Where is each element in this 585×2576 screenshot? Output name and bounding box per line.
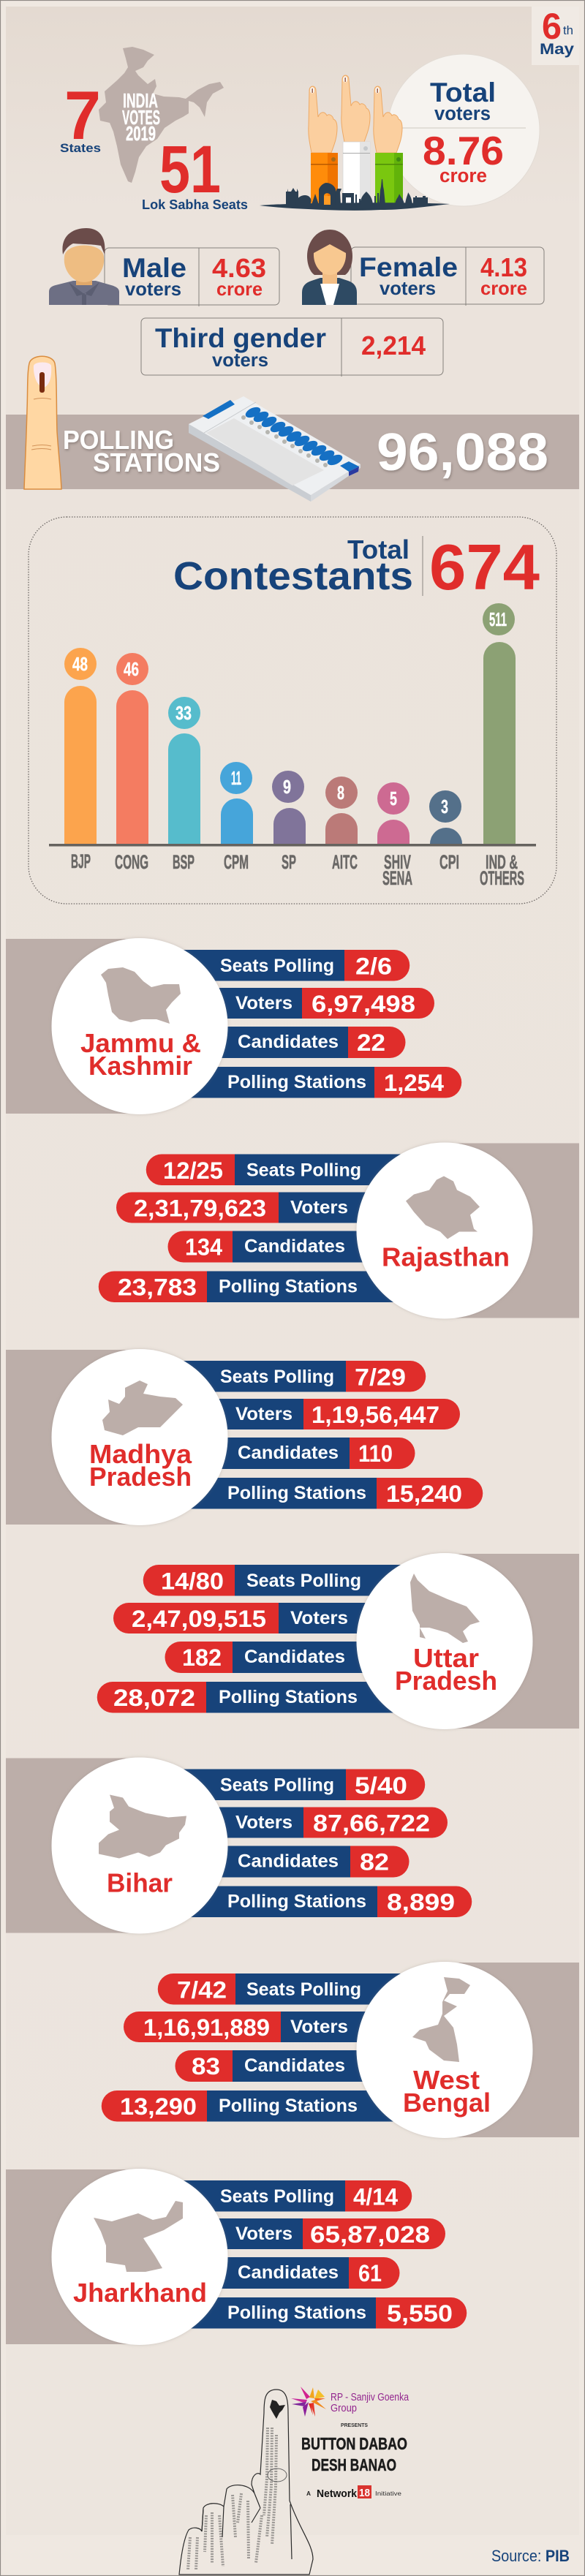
row: polling stations bbox=[97, 1682, 437, 1712]
total voters circle: crore bbox=[439, 165, 487, 186]
panel: third gender voters: 2,214 bbox=[361, 331, 426, 360]
row: polling stations: Polling Stations bbox=[219, 2096, 358, 2116]
bar: SP 9: SP bbox=[282, 851, 296, 873]
row: seats polling: Seats Polling bbox=[220, 956, 334, 976]
state name: Bihar bbox=[107, 1867, 173, 1898]
logo: A Network18 Initiative: Network bbox=[317, 2488, 358, 2500]
row: voters bbox=[146, 988, 434, 1019]
row: voters: Voters bbox=[290, 2017, 348, 2037]
row: candidates: 110 bbox=[358, 1440, 393, 1467]
date badge bbox=[532, 6, 579, 65]
bar: AITC 8: AITC bbox=[332, 851, 358, 873]
row: polling stations: 23,783 bbox=[118, 1274, 197, 1300]
bar: BJP 48: 48 bbox=[72, 653, 88, 675]
tagline: Button Dabao Desh Banao: DESH BANAO bbox=[312, 2455, 396, 2474]
stat: 7 states: States bbox=[60, 141, 101, 155]
icon: inked finger bbox=[24, 356, 61, 489]
icon: Delhi skyline bbox=[260, 179, 450, 211]
bar: CPI 3 bbox=[429, 790, 462, 873]
heading: total contestants: Total bbox=[347, 535, 410, 564]
panel: female voters bbox=[302, 230, 544, 306]
row: seats polling: Seats Polling bbox=[246, 1979, 361, 2000]
panel: third gender voters: Third gender bbox=[155, 323, 326, 353]
date badge: th bbox=[563, 23, 573, 37]
India map with title: INDIA bbox=[123, 89, 158, 112]
row: voters bbox=[146, 1808, 448, 1838]
row: voters bbox=[113, 1603, 439, 1633]
row: candidates: Candidates bbox=[238, 1032, 339, 1052]
row: polling stations: Polling Stations bbox=[227, 1483, 366, 1503]
icon: woman bbox=[302, 230, 357, 305]
row: voters: Voters bbox=[235, 993, 292, 1013]
panel: Jammu & Kashmir bbox=[6, 938, 461, 1114]
panel: Rajasthan bbox=[99, 1142, 579, 1319]
bar: Independents and others 511: IND & bbox=[486, 851, 518, 873]
row: seats polling bbox=[146, 1154, 439, 1185]
row: voters: 1,16,91,889 bbox=[143, 2014, 270, 2041]
map: West Bengal bbox=[412, 1977, 470, 2062]
row: seats polling: Seats Polling bbox=[246, 1160, 361, 1180]
box bbox=[105, 248, 279, 305]
logo: A Network18 Initiative bbox=[306, 2485, 401, 2500]
bar: SP 9: 9 bbox=[283, 776, 291, 798]
row: candidates: 22 bbox=[357, 1030, 385, 1056]
row: candidates bbox=[168, 1231, 437, 1262]
heading: total contestants: 674 bbox=[429, 531, 540, 603]
panel: Bihar bbox=[6, 1758, 472, 1933]
bar: AITC 8 bbox=[325, 777, 358, 873]
state name: Rajasthan bbox=[382, 1242, 510, 1272]
text: presents: PRESENTS bbox=[341, 2422, 368, 2428]
bar: CPI 3: CPI bbox=[439, 851, 459, 873]
row: candidates bbox=[146, 1846, 410, 1878]
panel: male voters: voters bbox=[125, 278, 181, 300]
state name bbox=[80, 1028, 201, 1081]
total voters circle: Total bbox=[430, 78, 496, 107]
row: seats polling bbox=[146, 2180, 412, 2211]
row: voters: Voters bbox=[235, 2224, 292, 2244]
icon: voting machine bbox=[189, 396, 361, 502]
panel: male voters: crore bbox=[216, 278, 263, 300]
bar: Shiv Sena 5: SHIV bbox=[384, 851, 411, 873]
state name bbox=[403, 2065, 491, 2118]
row: seats polling bbox=[146, 1769, 425, 1800]
state name: Kashmir bbox=[88, 1051, 192, 1081]
row: seats polling: Seats Polling bbox=[220, 2186, 334, 2207]
stat: 51 Lok Sabha seats bbox=[142, 132, 248, 212]
row: seats polling: 2/6 bbox=[355, 953, 392, 980]
row: candidates: 134 bbox=[185, 1234, 222, 1261]
row: candidates: Candidates bbox=[244, 2055, 345, 2076]
row: polling stations bbox=[99, 1271, 437, 1302]
map: Rajasthan bbox=[406, 1176, 480, 1239]
row: voters bbox=[116, 1192, 439, 1223]
state name: West bbox=[413, 2065, 480, 2095]
row: polling stations: Polling Stations bbox=[219, 1277, 358, 1297]
stat: 51 Lok Sabha seats: Lok Sabha Seats bbox=[142, 197, 248, 212]
row: candidates: Candidates bbox=[238, 1851, 339, 1872]
row: voters bbox=[146, 1399, 460, 1429]
panel: third gender voters: voters bbox=[212, 349, 268, 371]
row: candidates: 82 bbox=[360, 1848, 389, 1875]
row: candidates: Candidates bbox=[238, 1443, 339, 1463]
tagline: Button Dabao Desh Banao bbox=[301, 2434, 407, 2474]
row: polling stations bbox=[146, 1886, 472, 1917]
state name: Jammu & bbox=[80, 1028, 201, 1058]
panel: female voters: crore bbox=[480, 277, 527, 299]
total voters circle: 8.76 bbox=[423, 128, 504, 173]
state name: Madhya bbox=[89, 1439, 192, 1469]
map: Uttar Pradesh bbox=[410, 1574, 480, 1643]
row: seats polling bbox=[143, 1565, 439, 1595]
logo: A Network18 Initiative: A bbox=[306, 2490, 311, 2497]
logo: RP-Sanjiv Goenka Group: Group bbox=[331, 2402, 357, 2414]
panel: male voters bbox=[49, 228, 279, 306]
bar: BSP 33: 33 bbox=[176, 702, 192, 724]
map: Jammu & Kashmir bbox=[101, 967, 181, 1024]
logo: RP-Sanjiv Goenka Group: RP - Sanjiv Goenka bbox=[331, 2391, 410, 2403]
panel: West Bengal bbox=[102, 1962, 579, 2138]
bar: Independents and others 511: 511 bbox=[489, 608, 507, 630]
state name bbox=[89, 1439, 192, 1492]
map: Jharkhand bbox=[94, 2201, 183, 2272]
row: seats polling: Seats Polling bbox=[246, 1571, 361, 1591]
bar: CONG 46 bbox=[115, 653, 148, 873]
state name: Pradesh bbox=[395, 1666, 497, 1696]
heading: total contestants bbox=[173, 531, 540, 603]
row: polling stations bbox=[102, 2090, 437, 2122]
logo: A Network18 Initiative: 18 bbox=[359, 2487, 370, 2499]
stat: 7 states: 7 bbox=[64, 77, 101, 154]
row: candidates: 83 bbox=[192, 2053, 220, 2080]
India map with title: 2019 bbox=[126, 122, 156, 145]
bar: Shiv Sena 5: SENA bbox=[382, 867, 412, 889]
label: polling stations: STATIONS bbox=[93, 447, 220, 477]
map: Madhya Pradesh bbox=[102, 1380, 183, 1435]
value: 96,088: 96,088 bbox=[377, 423, 548, 482]
row: seats polling: 12/25 bbox=[163, 1157, 223, 1184]
row: polling stations: Polling Stations bbox=[219, 1687, 358, 1707]
row: voters: 65,87,028 bbox=[310, 2221, 430, 2248]
row: seats polling bbox=[146, 950, 410, 981]
tagline: Button Dabao Desh Banao: BUTTON DABAO bbox=[301, 2434, 407, 2453]
label: female voters: Female bbox=[359, 252, 458, 282]
row: candidates: 182 bbox=[182, 1644, 222, 1671]
row: candidates bbox=[176, 2050, 437, 2082]
row: candidates bbox=[146, 2257, 399, 2289]
value: 4.63 crore: 4.63 bbox=[212, 253, 266, 283]
row: seats polling: 7/42 bbox=[177, 1977, 227, 2003]
bar: CONG 46: CONG bbox=[115, 851, 148, 873]
bar: CPM 11: CPM bbox=[224, 851, 249, 873]
India map with title: VOTES bbox=[122, 106, 160, 129]
India map with title bbox=[99, 47, 224, 183]
row: polling stations: 8,899 bbox=[387, 1889, 455, 1916]
row: polling stations: 28,072 bbox=[113, 1685, 195, 1711]
date badge: May bbox=[540, 41, 574, 58]
row: voters: 87,66,722 bbox=[313, 1810, 430, 1837]
row: seats polling bbox=[158, 1973, 440, 2005]
panel: total contestants chart bbox=[29, 517, 556, 904]
label: polling stations bbox=[63, 425, 220, 477]
bar: Shiv Sena 5: 5 bbox=[390, 787, 397, 809]
source note: Source: PIB bbox=[491, 2547, 570, 2565]
row: candidates: Candidates bbox=[244, 1647, 345, 1667]
row: candidates bbox=[146, 1438, 415, 1469]
bar: SP 9 bbox=[272, 771, 306, 873]
row: voters: 2,31,79,623 bbox=[134, 1195, 266, 1221]
bar: BSP 33: BSP bbox=[173, 851, 195, 873]
row: polling stations: 5,550 bbox=[387, 2300, 453, 2327]
row: polling stations: 15,240 bbox=[386, 1481, 462, 1507]
row: voters: 1,19,56,447 bbox=[312, 1402, 439, 1428]
state name: Bengal bbox=[403, 2088, 491, 2118]
row: polling stations bbox=[146, 1478, 483, 1509]
box bbox=[351, 247, 544, 304]
row: candidates: Candidates bbox=[244, 1236, 345, 1256]
row: voters: Voters bbox=[235, 1404, 292, 1424]
row: seats polling: Seats Polling bbox=[220, 1775, 334, 1796]
state name bbox=[395, 1643, 497, 1696]
row: voters bbox=[146, 2218, 445, 2249]
heading: total contestants: Contestants bbox=[173, 554, 413, 598]
bar: Independents and others 511 bbox=[480, 603, 524, 889]
row: polling stations bbox=[146, 1067, 461, 1098]
row: seats polling bbox=[146, 1361, 426, 1392]
row: candidates bbox=[165, 1642, 437, 1673]
bar: CONG 46: 46 bbox=[124, 658, 139, 680]
bar: BJP 48: BJP bbox=[71, 850, 91, 872]
row: polling stations: Polling Stations bbox=[227, 1891, 366, 1911]
value: 4.13 crore: 4.13 bbox=[480, 252, 527, 282]
total voters circle: voters bbox=[434, 102, 491, 124]
logo: RP-Sanjiv Goenka Group bbox=[291, 2387, 410, 2417]
bar: CPM 11: 11 bbox=[231, 767, 241, 789]
state name: Pradesh bbox=[89, 1462, 192, 1492]
bar: AITC 8: 8 bbox=[337, 782, 344, 804]
state name: Uttar bbox=[413, 1643, 479, 1673]
bar: BSP 33 bbox=[168, 697, 200, 873]
row: voters: Voters bbox=[290, 1608, 348, 1628]
row: polling stations: 1,254 bbox=[384, 1070, 444, 1096]
row: seats polling: Seats Polling bbox=[220, 1367, 334, 1387]
panel: Uttar Pradesh bbox=[97, 1553, 579, 1729]
bar: CPM 11 bbox=[220, 762, 253, 873]
bar: CPI 3: 3 bbox=[441, 796, 448, 817]
row: seats polling: 7/29 bbox=[355, 1364, 406, 1391]
row: candidates: 61 bbox=[358, 2260, 382, 2286]
row: voters bbox=[124, 2012, 440, 2042]
row: voters: 2,47,09,515 bbox=[132, 1606, 266, 1632]
row: polling stations: 13,290 bbox=[120, 2093, 197, 2120]
bar: Shiv Sena 5 bbox=[377, 782, 412, 889]
row: polling stations: Polling Stations bbox=[227, 2303, 366, 2323]
state name: Jharkhand bbox=[73, 2278, 207, 2308]
row: candidates bbox=[146, 1027, 405, 1058]
row: seats polling: 14/80 bbox=[161, 1568, 224, 1594]
panel: Madhya Pradesh bbox=[6, 1349, 483, 1525]
row: voters: 6,97,498 bbox=[312, 991, 415, 1017]
label: male voters: Male bbox=[122, 253, 186, 283]
total voters circle bbox=[388, 54, 540, 206]
map: Bihar bbox=[99, 1794, 186, 1859]
bar: BJP 48 bbox=[64, 648, 97, 872]
icon: man bbox=[49, 228, 119, 305]
label: polling stations: POLLING bbox=[63, 425, 174, 455]
icon: three voting hands with tricolour sleeves bbox=[309, 75, 403, 203]
panel: female voters: voters bbox=[380, 277, 436, 299]
band: polling stations bbox=[6, 356, 579, 502]
bar: Independents and others 511: OTHERS bbox=[480, 867, 524, 889]
icon: sketched hand with inked finger bbox=[179, 2390, 313, 2575]
row: polling stations: Polling Stations bbox=[227, 1072, 366, 1092]
row: seats polling: 4/14 bbox=[353, 2183, 398, 2210]
row: seats polling: 5/40 bbox=[355, 1772, 407, 1799]
row: candidates: Candidates bbox=[238, 2262, 339, 2283]
row: polling stations bbox=[146, 2297, 467, 2328]
row: voters: Voters bbox=[235, 1812, 292, 1832]
row: voters: Voters bbox=[290, 1198, 348, 1218]
date badge: 6 bbox=[542, 6, 562, 47]
panel: third gender voters bbox=[141, 318, 443, 377]
panel: Jharkhand bbox=[6, 2169, 467, 2345]
logo: A Network18 Initiative: Initiative bbox=[375, 2490, 401, 2497]
stat: 51 Lok Sabha seats: 51 bbox=[159, 132, 221, 207]
